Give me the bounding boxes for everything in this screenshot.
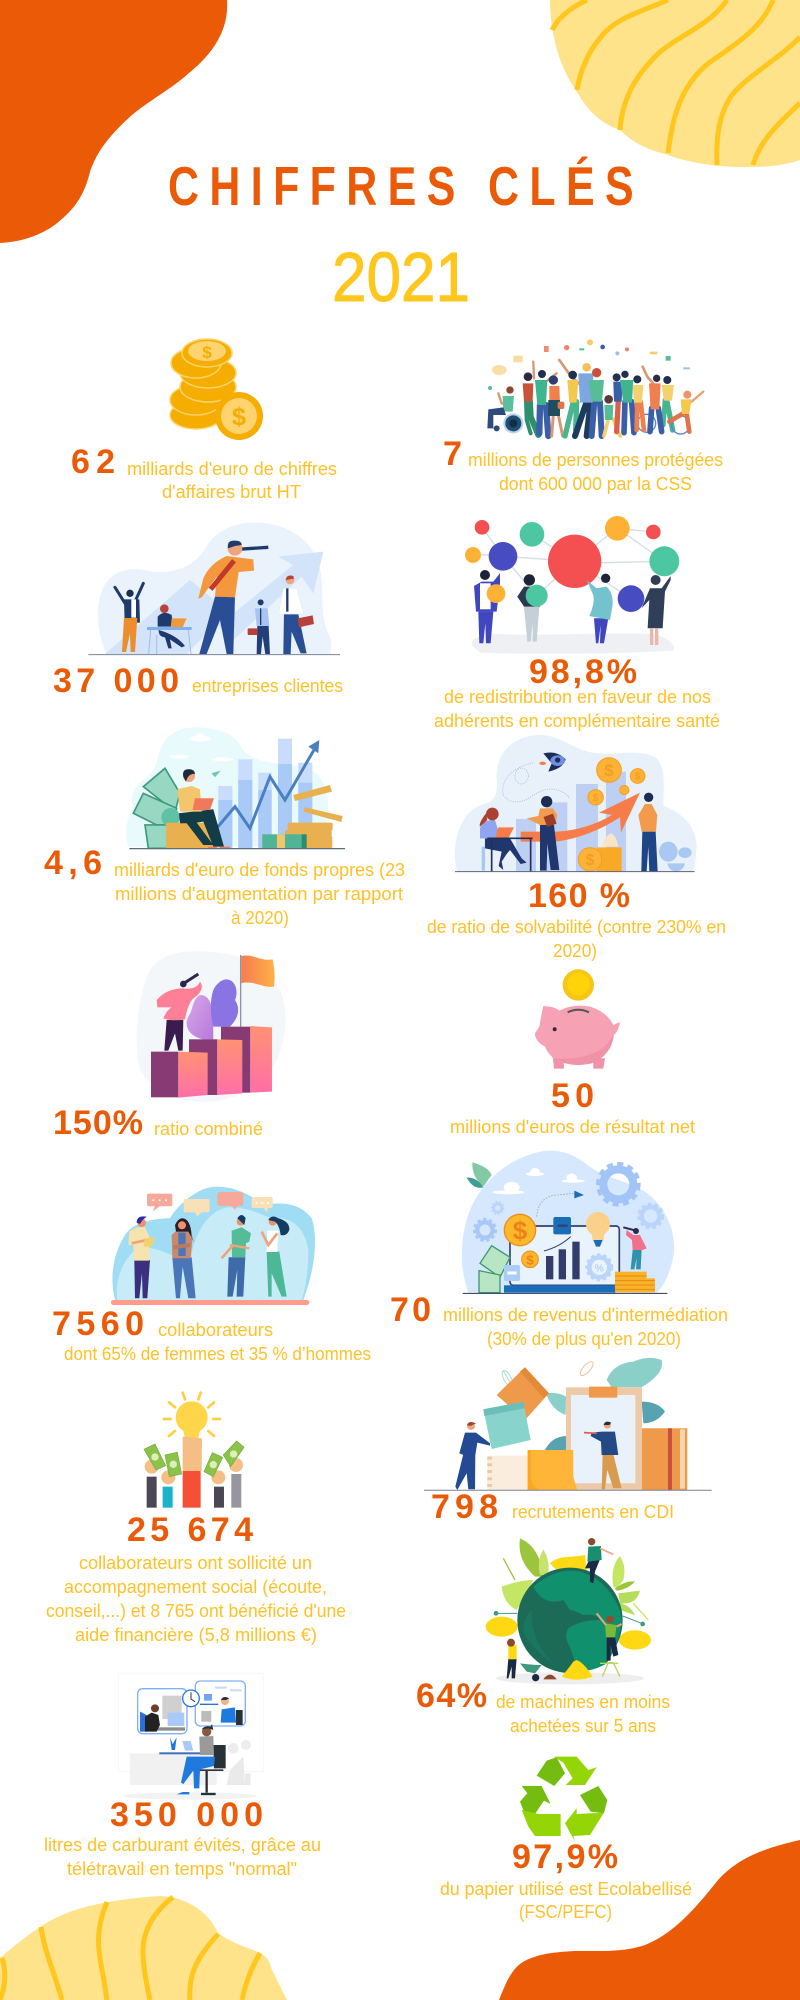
man left xyxy=(455,1422,490,1490)
clock xyxy=(183,1690,199,1707)
coins xyxy=(504,1214,538,1268)
description xyxy=(496,1692,670,1736)
standing woman xyxy=(527,796,559,871)
foliage xyxy=(486,1538,651,1650)
title: CHIFFRES CLÉS xyxy=(168,155,634,217)
description: millions de revenus d'intermédiation xyxy=(443,1305,728,1325)
panel: 25 674 xyxy=(46,1393,346,1645)
panel: 62 milliards xyxy=(71,339,337,502)
teal note xyxy=(483,1402,531,1449)
gears xyxy=(474,1164,663,1241)
description: achetées sur 5 ans xyxy=(510,1716,656,1736)
boxes xyxy=(151,1026,272,1098)
figure: man with briefcase xyxy=(279,575,314,654)
illustration: remote work xyxy=(118,1673,263,1800)
description: recrutements en CDI xyxy=(512,1502,674,1522)
figure: left gardener with wheelbarrow xyxy=(507,1639,557,1681)
coins: $ xyxy=(513,1215,528,1245)
description: du papier utilisé est Ecolabellisé xyxy=(440,1879,692,1899)
figure: small man xyxy=(248,599,270,654)
illustration: podium with flag xyxy=(137,951,286,1102)
clouds xyxy=(492,1168,585,1194)
number: 37 000 xyxy=(53,662,179,700)
illustration: team with rising arrow xyxy=(455,735,697,872)
video frame 2 xyxy=(195,1681,245,1726)
laptop xyxy=(504,1217,619,1293)
light bulb xyxy=(164,1393,220,1450)
panel: 7 millions xyxy=(443,339,723,494)
panel: 97,9% xyxy=(440,1757,692,1922)
rocket xyxy=(539,752,566,772)
description: 2020) xyxy=(553,941,597,961)
panel: 350 000 xyxy=(44,1673,321,1879)
description xyxy=(127,459,337,502)
speech bubbles xyxy=(147,1192,273,1217)
year: 2021 xyxy=(332,238,470,316)
coins xyxy=(578,758,645,871)
number: 798 xyxy=(431,1488,498,1526)
green cash xyxy=(262,834,307,848)
figure: woman in dark dress xyxy=(618,575,671,645)
number: 62 xyxy=(71,443,115,481)
clipboard xyxy=(566,1387,642,1490)
number: 25 674 xyxy=(127,1511,253,1549)
figure: woman with green circle xyxy=(517,574,548,642)
description: de redistribution en faveur de nos xyxy=(444,687,711,707)
person with laptop xyxy=(177,769,230,848)
number: 50 xyxy=(551,1077,594,1115)
seated woman xyxy=(480,808,533,871)
description xyxy=(434,687,720,731)
icon: coin stack: $ xyxy=(202,343,212,362)
video frame 1 xyxy=(138,1689,187,1734)
description: aide financière (5,8 millions €) xyxy=(75,1625,317,1645)
description xyxy=(44,1835,321,1879)
person with telescope xyxy=(623,1227,647,1269)
coins: $ xyxy=(604,761,614,780)
illustration: businesspeople with telescope xyxy=(88,523,340,655)
paperclips xyxy=(500,1360,595,1388)
figure: woman with arms crossed xyxy=(172,1218,196,1298)
panel: 64% xyxy=(416,1538,670,1736)
description: entreprises clientes xyxy=(192,676,343,696)
panel: 160 % xyxy=(427,735,726,961)
number: 150% xyxy=(53,1104,143,1142)
confetti xyxy=(488,339,690,390)
description xyxy=(114,860,405,928)
leaves xyxy=(467,1162,492,1188)
blob: striped yellow bottom-left xyxy=(0,1896,287,2000)
coins: $ xyxy=(593,793,599,804)
arrow xyxy=(217,740,319,828)
description: de ratio de solvabilité (contre 230% en xyxy=(427,917,726,937)
man right xyxy=(584,1421,622,1489)
figure: woman with phone xyxy=(262,1216,289,1297)
yellow note xyxy=(528,1450,577,1490)
description: (FSC/PEFC) xyxy=(519,1902,612,1922)
globe xyxy=(517,1568,623,1673)
light bulb xyxy=(586,1212,610,1247)
illustration: money, chart and person on coins xyxy=(126,727,345,849)
blob: orange top-left xyxy=(0,0,227,243)
pig xyxy=(535,1006,620,1069)
panel: 7560 xyxy=(52,1187,371,1364)
blob: striped yellow top-right xyxy=(550,0,800,167)
description: (30% de plus qu'en 2020) xyxy=(487,1329,681,1349)
coins: $ xyxy=(526,1252,534,1267)
panel: 50 millions xyxy=(450,969,695,1137)
coin stacks xyxy=(166,785,343,848)
banknotes xyxy=(144,1441,244,1477)
number: 70 xyxy=(390,1291,431,1329)
faded background xyxy=(118,1673,263,1800)
flag xyxy=(241,955,275,1027)
number: 97,9% xyxy=(512,1838,618,1876)
description: millions d'augmentation par rapport xyxy=(115,884,403,904)
description: accompagnement social (écoute, xyxy=(64,1577,327,1597)
illustration: hands holding money and light bulb xyxy=(144,1393,244,1508)
description: collaborateurs xyxy=(158,1320,273,1340)
description: adhérents en complémentaire santé xyxy=(434,711,720,731)
figure: top gardener xyxy=(585,1538,613,1583)
figure: man in green xyxy=(222,1215,251,1297)
banknotes xyxy=(479,1246,510,1293)
description: à 2020) xyxy=(231,908,289,928)
figure: big man with telescope xyxy=(198,541,268,654)
number: 350 000 xyxy=(110,1796,263,1834)
icon: coin stack xyxy=(170,339,263,440)
man xyxy=(638,793,658,871)
number: 160 % xyxy=(528,877,630,915)
description: milliards d'euro de fonds propres (23 xyxy=(114,860,405,880)
banknotes xyxy=(133,768,180,848)
laptop: % xyxy=(595,1263,604,1274)
panel: 37 000 xyxy=(53,523,343,700)
illustration: piggy bank xyxy=(535,969,620,1069)
panel: 98,8% xyxy=(434,516,720,731)
description xyxy=(46,1553,346,1645)
description: millions d'euros de résultat net xyxy=(450,1117,695,1137)
description: millions de personnes protégées xyxy=(468,450,723,470)
wheelchair person xyxy=(487,386,522,432)
description xyxy=(443,1305,728,1349)
book xyxy=(642,1428,687,1490)
figure: woman at desk xyxy=(147,604,192,654)
orange diamond note xyxy=(497,1367,549,1420)
description xyxy=(440,1879,692,1922)
ladder xyxy=(600,1663,620,1677)
panel: 150% xyxy=(53,951,286,1142)
description: collaborateurs ont sollicité un xyxy=(79,1553,312,1573)
leaves xyxy=(187,979,238,1039)
panel: 798 xyxy=(424,1358,712,1526)
number: 7560 xyxy=(52,1305,144,1343)
number: 4,6 xyxy=(44,844,102,882)
number: 98,8% xyxy=(529,653,637,691)
illustration: globe with gardeners xyxy=(486,1538,651,1684)
illustration: crowd xyxy=(487,339,703,436)
blob: orange bottom-right xyxy=(499,1840,800,2000)
description: litres de carburant évités, grâce au xyxy=(44,1835,321,1855)
illustration: laptop, gears and coins xyxy=(462,1151,674,1293)
figure: right gardener xyxy=(597,1613,622,1661)
illustration: network of circles and people xyxy=(465,516,679,654)
description xyxy=(64,1320,371,1364)
hands xyxy=(145,1437,243,1508)
coins: $ xyxy=(635,772,641,783)
number: 64% xyxy=(416,1677,487,1715)
plant xyxy=(659,842,692,871)
description: conseil,...) et 8 765 ont bénéficié d'une xyxy=(46,1601,346,1621)
icon: recycling symbol xyxy=(520,1757,607,1842)
growth arrow xyxy=(521,793,640,842)
description: milliards d'euro de chiffres xyxy=(127,459,337,479)
icon: coin stack: $ xyxy=(232,403,246,431)
description: dont 65% de femmes et 35 % d’hommes xyxy=(64,1344,371,1364)
illustration: notes and clipboard xyxy=(424,1358,712,1490)
bars xyxy=(218,739,312,848)
description xyxy=(427,917,726,961)
woman at desk xyxy=(159,1724,226,1794)
panel: 4,6 milliards xyxy=(44,727,405,928)
description: ratio combiné xyxy=(154,1119,263,1139)
number: 7 xyxy=(443,435,462,473)
figure: man with notepad xyxy=(128,1216,155,1298)
description: d'affaires brut HT xyxy=(162,482,301,502)
bottom plant xyxy=(562,1660,593,1680)
description: dont 600 000 par la CSS xyxy=(499,474,692,494)
coin stacks xyxy=(615,1272,655,1292)
person with telescope xyxy=(157,974,202,1051)
coins: $ xyxy=(586,852,595,869)
figure: woman arms up xyxy=(115,583,143,652)
illustration: colleagues talking xyxy=(111,1187,315,1305)
description xyxy=(468,450,723,494)
figure: person in teal coat xyxy=(587,574,613,643)
panel: 70 millions xyxy=(390,1151,728,1349)
figure: man with orange circle xyxy=(474,570,505,643)
leaves xyxy=(545,1358,665,1450)
cream notebook xyxy=(487,1456,529,1490)
description: télétravail en temps "normal" xyxy=(67,1859,297,1879)
description: de machines en moins xyxy=(496,1692,670,1712)
